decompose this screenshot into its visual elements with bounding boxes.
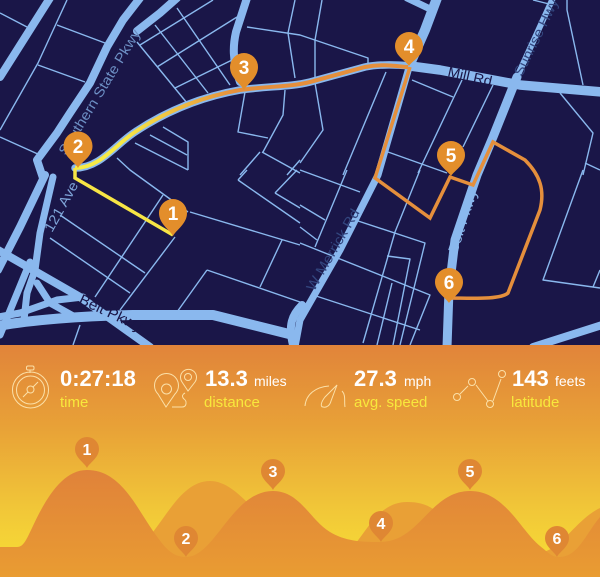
map background xyxy=(0,0,600,345)
stat: latitude xyxy=(454,366,585,411)
unit: feets xyxy=(555,373,585,389)
route leg 1 to 2 xyxy=(75,168,173,235)
elevation marker 6 xyxy=(545,526,569,557)
value: 13.3 xyxy=(205,366,248,391)
value: 143 xyxy=(512,366,549,391)
elevation marker 4 xyxy=(369,511,393,542)
marker 1 xyxy=(159,199,187,236)
marker 6: 6 xyxy=(444,273,454,294)
route line xyxy=(75,65,542,298)
marker 1: 1 xyxy=(168,204,179,225)
elevation marker 5 xyxy=(458,459,482,490)
icon: map pins xyxy=(154,369,197,407)
street labels xyxy=(41,0,562,336)
panel background xyxy=(0,345,600,577)
label: Sunrise Hwy: Sunrise Hwy xyxy=(510,0,562,78)
label: Southern State Pkwy: Southern State Pkwy xyxy=(55,26,144,158)
panel: stats and elevation xyxy=(0,345,600,577)
value: 0:27:18 xyxy=(60,366,136,391)
label: 121 Ave: 121 Ave xyxy=(41,178,81,234)
background hills xyxy=(153,481,600,577)
marker 6 xyxy=(435,268,463,303)
elevation marker 2: 2 xyxy=(182,531,191,548)
minor streets xyxy=(0,0,600,345)
foreground hills xyxy=(0,470,600,577)
marker 2: 2 xyxy=(73,137,83,158)
elevation marker 4: 4 xyxy=(377,516,386,533)
label: Belt Pkwy west: Belt Pkwy xyxy=(76,291,146,336)
marker 4: 4 xyxy=(404,37,415,58)
label: Belt Pkwy east: Belt Pkwy xyxy=(445,187,480,255)
route leg 2 to 4 xyxy=(75,65,408,168)
elevation chart xyxy=(0,437,600,577)
label: distance xyxy=(204,394,260,411)
unit: mph xyxy=(404,373,431,389)
elevation marker 3: 3 xyxy=(269,464,278,481)
elevation markers xyxy=(75,437,569,557)
icon: line chart xyxy=(454,370,506,408)
label: W Merrick Rd: W Merrick Rd xyxy=(303,206,363,294)
stat: distance xyxy=(154,366,287,411)
label: Mill Rd: Mill Rd xyxy=(446,63,494,89)
marker 5: 5 xyxy=(446,146,457,167)
map markers xyxy=(64,32,465,303)
elevation marker 6: 6 xyxy=(553,531,562,548)
marker 3 xyxy=(230,53,258,90)
label: latitude xyxy=(511,394,559,411)
icon: speedometer xyxy=(305,385,345,407)
stat: time xyxy=(12,366,136,411)
elevation marker 1: 1 xyxy=(83,442,92,459)
label: avg. speed xyxy=(354,394,427,411)
elevation marker 3 xyxy=(261,459,285,490)
label: time xyxy=(60,394,88,411)
elevation marker 1 xyxy=(75,437,99,468)
panel: map xyxy=(0,0,600,347)
icon: stopwatch xyxy=(12,366,48,408)
elevation marker 2 xyxy=(174,526,198,557)
major roads xyxy=(0,0,600,347)
elevation marker 5: 5 xyxy=(466,464,475,481)
marker 3: 3 xyxy=(239,58,249,79)
marker 5 xyxy=(437,141,465,176)
stat: average speed xyxy=(305,366,431,411)
unit: miles xyxy=(254,373,287,389)
marker 2 xyxy=(64,132,92,168)
marker 4 xyxy=(395,32,423,66)
route leg 4 to 6 xyxy=(375,67,542,298)
value: 27.3 xyxy=(354,366,397,391)
